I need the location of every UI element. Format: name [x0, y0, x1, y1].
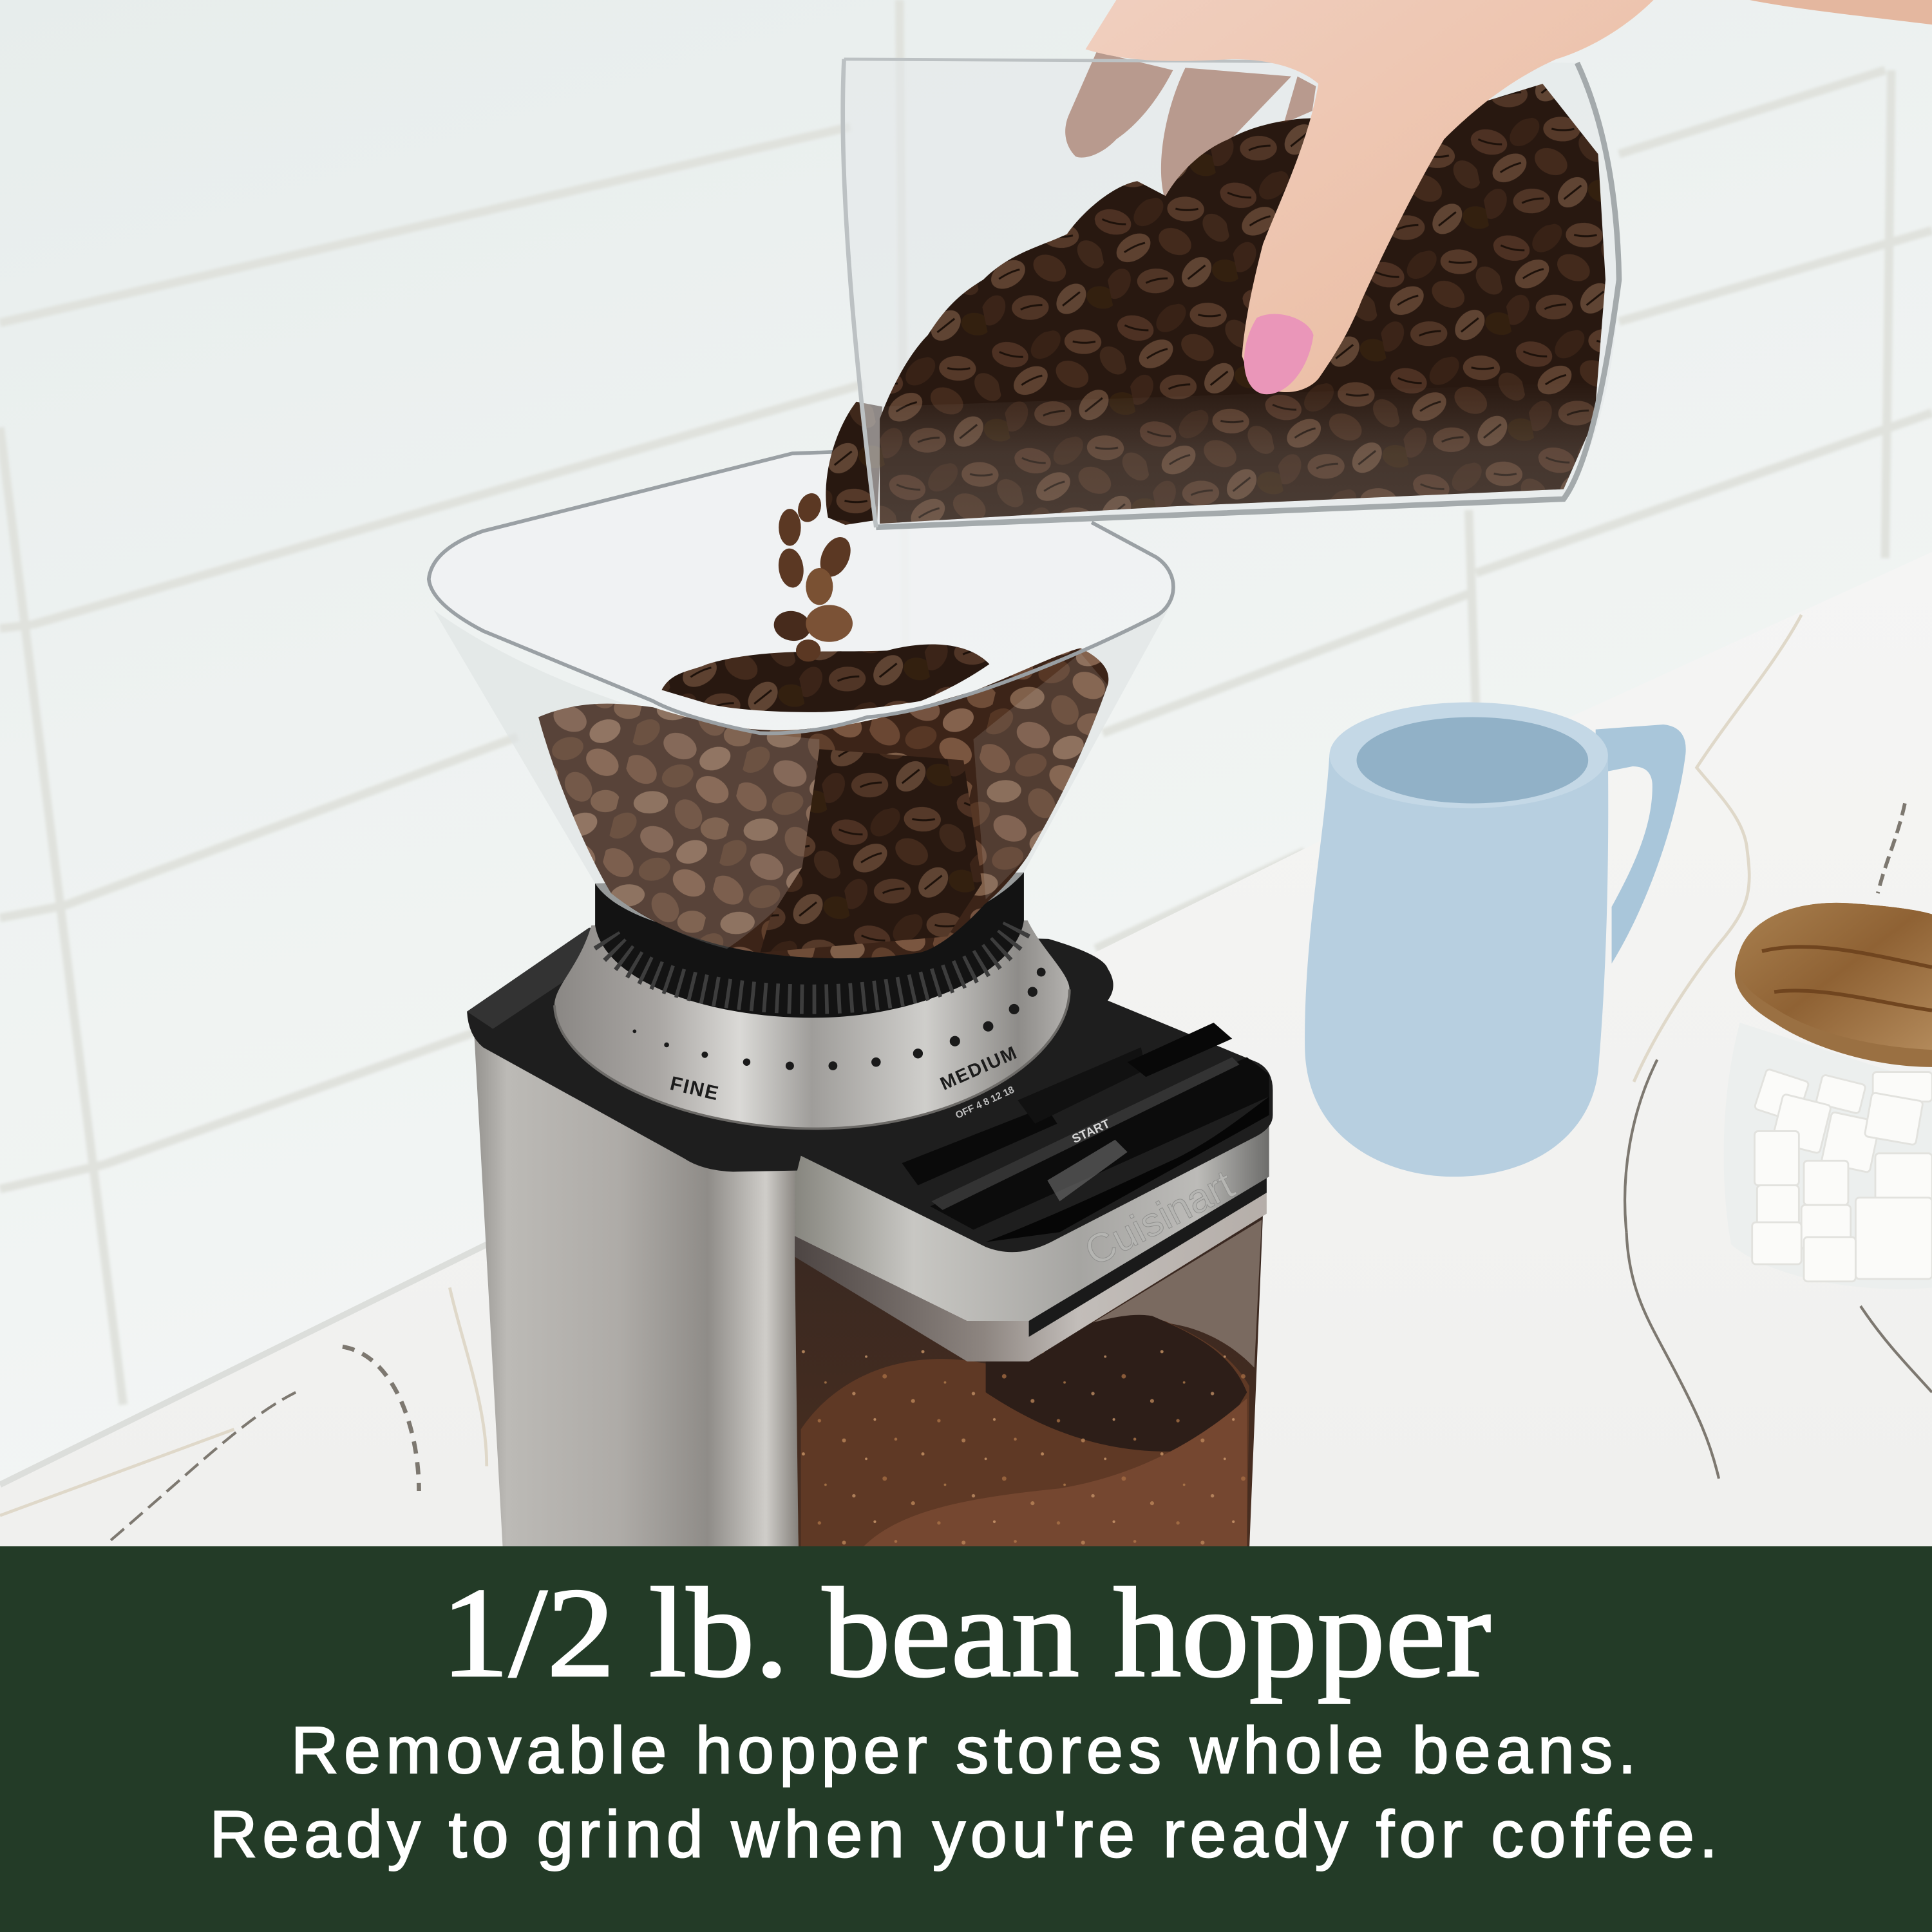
beans in canister	[880, 84, 1605, 524]
haze on left beans	[538, 704, 819, 949]
beans in hopper	[538, 648, 1108, 958]
hand fingers behind glass	[1065, 52, 1316, 197]
dark central beans	[760, 749, 982, 952]
glass canister with beans	[843, 52, 1619, 527]
rim interior	[429, 451, 1173, 734]
sugar jar with wooden lid	[1724, 903, 1932, 1289]
title: 1/2 lb. bean hopper	[441, 1562, 1491, 1704]
glossy reflection	[1047, 1140, 1128, 1201]
glass hopper with beans	[429, 451, 1173, 958]
black deck	[467, 928, 1273, 1252]
green caption banner	[0, 1546, 1932, 1932]
falling beans	[772, 402, 882, 661]
label: timer: OFF 4 8 12 18	[954, 1084, 1016, 1121]
description line 2: Ready to grind when you're ready for coffee.	[209, 1796, 1718, 1871]
label: fine: FINE	[668, 1072, 721, 1105]
marble counter	[0, 552, 1932, 1548]
black burr ring	[595, 873, 1024, 1018]
top bean pile	[661, 645, 989, 712]
description line 1: Removable hopper stores whole beans.	[291, 1712, 1636, 1787]
haze on right beans	[973, 653, 1108, 900]
hopper body	[433, 605, 1171, 943]
grounds container	[795, 1177, 1267, 1548]
embossed brand: Cuisinart	[1078, 1162, 1242, 1274]
grind dial dots	[632, 968, 1046, 1070]
coffee grinder	[467, 873, 1273, 1548]
haze on lower beans	[880, 382, 1602, 524]
rim outline	[429, 451, 1173, 734]
stainless band	[795, 1115, 1269, 1321]
label: start: START	[1070, 1117, 1112, 1146]
steel body left face	[475, 1037, 799, 1548]
pink nail	[1244, 314, 1314, 394]
hand pouring	[1086, 0, 1932, 394]
forearm	[1750, 0, 1932, 24]
control sliders	[902, 1023, 1269, 1229]
steel cone and dial	[554, 920, 1070, 1129]
label: medium: MEDIUM	[937, 1042, 1021, 1095]
blue mug	[1305, 703, 1686, 1177]
